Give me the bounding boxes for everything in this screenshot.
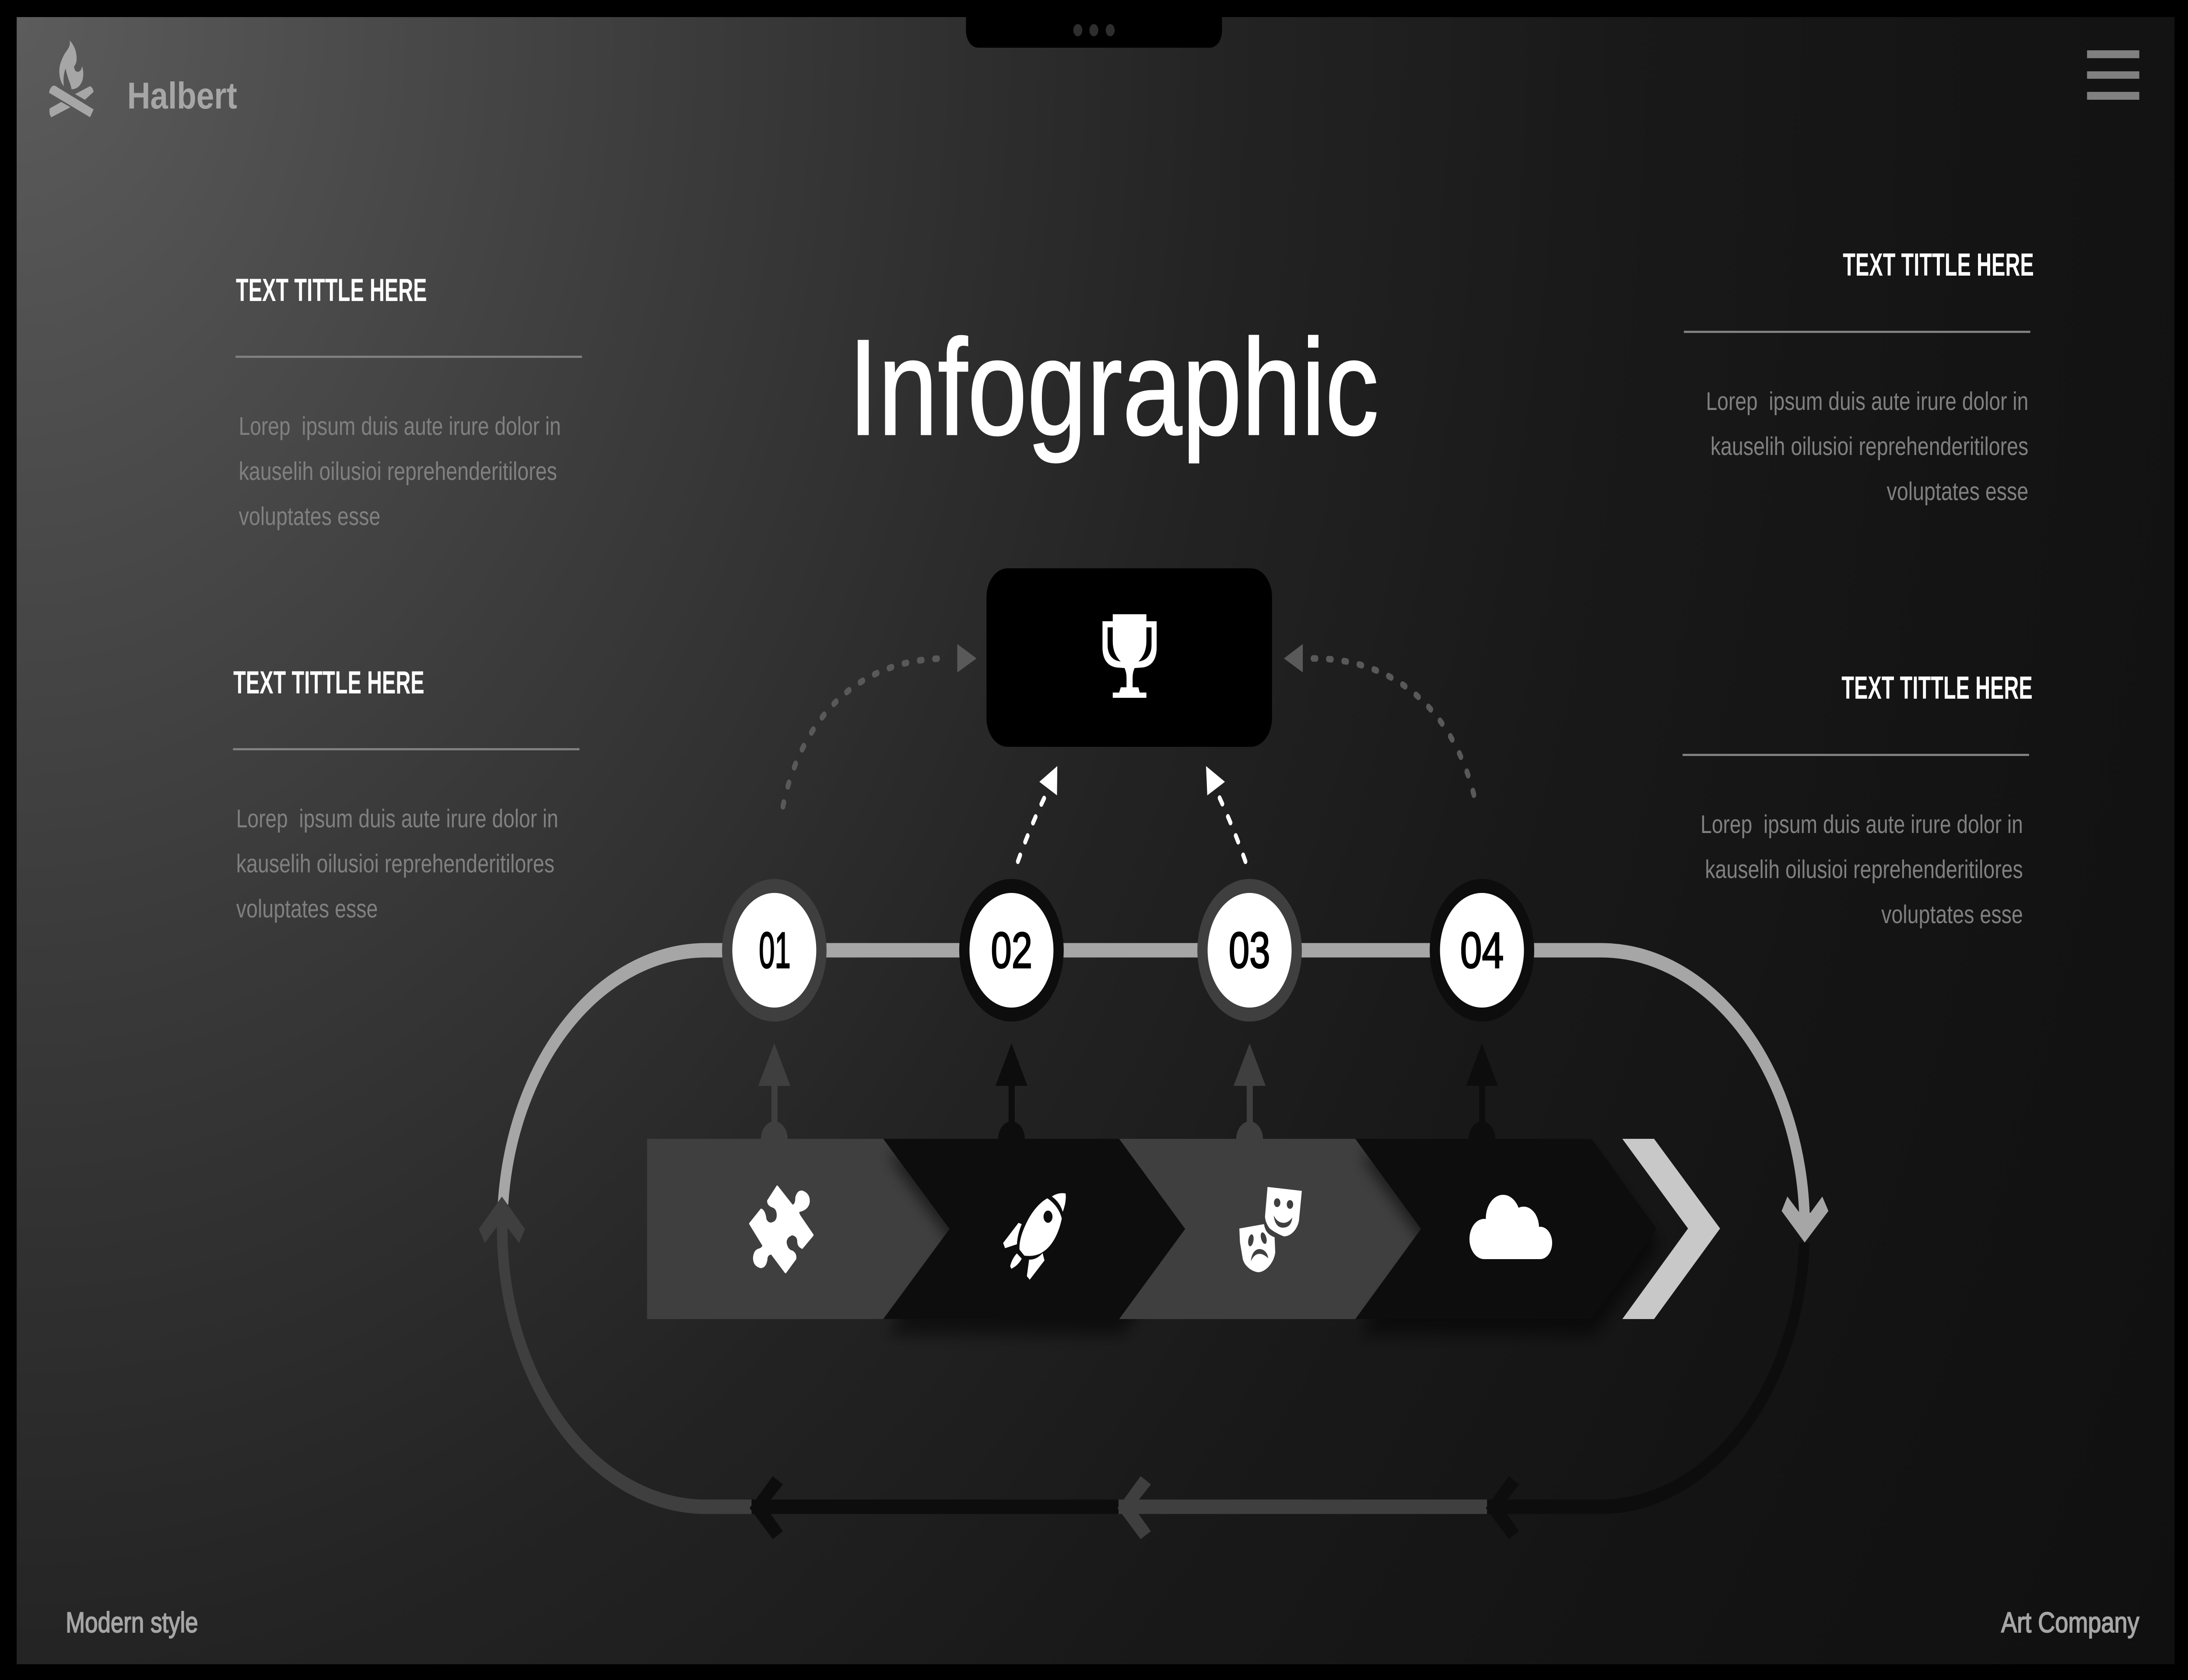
- text block: lower left: Lorep ipsum duis aute irure dolor in: [236, 805, 558, 833]
- arrowhead: bottom 2: [1118, 1476, 1151, 1539]
- icon: cloud: [1469, 1195, 1552, 1259]
- looping track: [479, 950, 1828, 1539]
- arrow: step 2 stem: [996, 1043, 1027, 1158]
- icon: puzzle piece: [750, 1186, 813, 1272]
- text block: top left: voluptates esse: [239, 502, 380, 531]
- step 02 marker: [959, 879, 1064, 1022]
- trophy box: [986, 568, 1272, 747]
- step 04 marker: [1430, 879, 1534, 1022]
- chevron 2: [883, 1139, 1185, 1319]
- step 04 marker: 04: [1460, 922, 1504, 979]
- arrow: step 4 stem: [1466, 1043, 1498, 1158]
- text block: lower left: kauselih oilusioi reprehenderitilores: [236, 850, 554, 878]
- arrowhead: left up: [479, 1197, 525, 1243]
- arrow: dashed left gray: [783, 644, 977, 806]
- text block: lower right: voluptates esse: [1881, 900, 2023, 929]
- logo: [49, 40, 237, 117]
- step 01 marker: 01: [759, 922, 791, 979]
- text block: top left: TEXT TITTLE HERE: [236, 272, 427, 308]
- step 03 marker: 03: [1229, 922, 1270, 979]
- chevron end: [1622, 1139, 1720, 1319]
- text block: lower right: kauselih oilusioi reprehenderitilores: [1705, 855, 2023, 884]
- icon: campfire: [49, 40, 94, 117]
- chevron 4: [1355, 1139, 1657, 1319]
- text block: top right: Lorep ipsum duis aute irure dolor in: [1706, 387, 2028, 416]
- text block: lower right: [1683, 670, 2033, 929]
- title: Infographic: [849, 311, 1379, 464]
- chevron 3: [1119, 1139, 1421, 1319]
- text block: lower right: Lorep ipsum duis aute irure dolor in: [1701, 810, 2023, 839]
- arrow: step 3 stem: [1234, 1043, 1266, 1158]
- arrow: step 1 stem: [758, 1043, 790, 1158]
- arrow: dashed white left: [1018, 766, 1057, 861]
- footer left: Modern style: [66, 1607, 198, 1639]
- text block: lower right: TEXT TITTLE HERE: [1841, 670, 2033, 706]
- arrowhead: bottom 1: [750, 1476, 783, 1539]
- text block: lower left: voluptates esse: [236, 895, 378, 923]
- arrowhead: right down: [1781, 1197, 1828, 1242]
- text block: lower left: TEXT TITTLE HERE: [233, 665, 424, 700]
- text block: top left: [235, 272, 582, 531]
- arrow: dashed right gray: [1284, 644, 1476, 806]
- icon: hamburger menu: [2087, 50, 2139, 100]
- text block: top right: [1684, 247, 2034, 506]
- arrow: dashed white right: [1206, 766, 1245, 861]
- text block: top right: kauselih oilusioi reprehenderitilores: [1711, 432, 2028, 461]
- arrowhead: bottom 3: [1486, 1476, 1519, 1539]
- step 02 marker: 02: [991, 922, 1032, 979]
- text block: top right: voluptates esse: [1887, 477, 2028, 506]
- step 03 marker: [1197, 879, 1302, 1022]
- text block: lower left: [233, 665, 579, 923]
- chevron 1: [647, 1139, 950, 1319]
- icon: theatre masks: [1239, 1187, 1302, 1272]
- icon: trophy: [1102, 614, 1157, 698]
- brand name: Halbert: [127, 75, 237, 116]
- icon: rocket: [1003, 1193, 1066, 1280]
- footer right: Art Company: [2001, 1607, 2139, 1639]
- text block: top left: kauselih oilusioi reprehenderitilores: [239, 457, 557, 486]
- top notch: [966, 13, 1222, 48]
- step 01 marker: [722, 879, 827, 1022]
- text block: top right: TEXT TITTLE HERE: [1843, 247, 2034, 283]
- text block: top left: Lorep ipsum duis aute irure dolor in: [239, 412, 561, 441]
